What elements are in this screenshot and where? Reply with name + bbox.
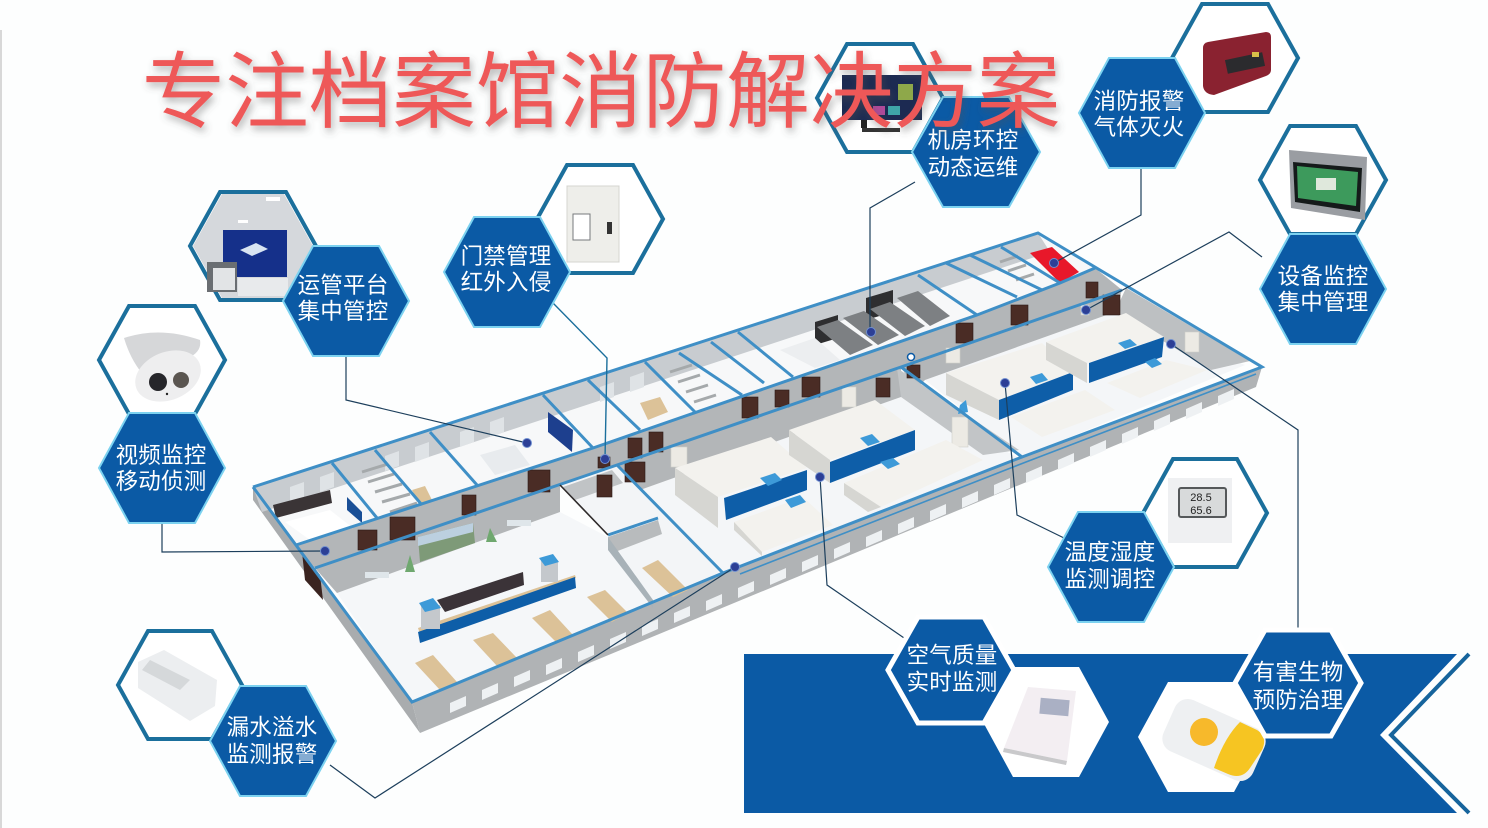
callout: temperature and humidity (1048, 459, 1267, 622)
icon: temperature sensor: 28.5 (1190, 492, 1212, 504)
callout: temperature and humidity: 监测调控 (1065, 567, 1155, 592)
icon: air quality sensor (1003, 687, 1076, 765)
callout: water leak: 监测报警 (227, 742, 317, 767)
server racks (780, 290, 950, 368)
storage cabinets (675, 313, 1207, 556)
callout: video surveillance: 视频监控 (116, 443, 206, 468)
callout: room environment: 动态运维 (928, 155, 1018, 180)
top row back wall (253, 233, 1050, 512)
corridor walls (296, 268, 1250, 608)
callout: fire alarm: 气体灭火 (1094, 115, 1184, 140)
title: 专注档案馆消防解决方案 (142, 45, 1060, 139)
callout: room environment: 机房环控 (928, 128, 1018, 153)
doors (358, 282, 1120, 550)
callout: temperature and humidity: 温度湿度 (1065, 540, 1155, 565)
lobby (365, 520, 688, 690)
blue wall outlines (253, 233, 1262, 702)
icon: temperature sensor (1168, 478, 1232, 543)
wall mounted units (671, 305, 1199, 467)
icon: temperature sensor: 65.6 (1190, 505, 1212, 517)
bottom banner (744, 654, 1469, 813)
callout: equipment monitoring (1260, 126, 1386, 344)
callout: operations platform: 运管平台 (298, 273, 388, 298)
icon: dome camera (124, 332, 209, 411)
exterior walls (253, 367, 1262, 733)
icon: monitor (842, 75, 922, 132)
callout: access control: 门禁管理 (461, 244, 551, 269)
callout: access control: 红外入侵 (461, 270, 551, 295)
callout: operations platform: 集中管控 (298, 299, 388, 324)
icon: control room video wall (193, 194, 313, 298)
icon: leak detector (138, 650, 217, 721)
callout: air quality: 实时监测 (907, 670, 997, 695)
callout: video surveillance (99, 306, 225, 523)
floors (253, 233, 1245, 702)
icon: fire alarm panel (1203, 32, 1271, 95)
furniture in rooms (273, 397, 668, 540)
callout: water leak (118, 631, 336, 796)
callout: air quality (888, 617, 1109, 777)
callout: equipment monitoring: 设备监控 (1278, 264, 1368, 289)
icon: pest repeller (1158, 694, 1270, 786)
isometric building floor plan (253, 233, 1262, 733)
callout: pest prevention (1138, 630, 1361, 792)
callout: fire alarm: 消防报警 (1094, 89, 1184, 114)
icon: touch panel (1289, 150, 1367, 220)
callout: fire alarm (1079, 4, 1298, 168)
callout: video surveillance: 移动侦测 (116, 469, 206, 494)
callout: pest prevention: 预防治理 (1253, 688, 1343, 713)
connector lines and location dots (162, 168, 1298, 798)
icon: access controller box (567, 186, 619, 262)
callout: equipment monitoring: 集中管理 (1278, 290, 1368, 315)
callout: water leak: 漏水溢水 (227, 715, 317, 740)
stairs (362, 256, 1034, 512)
callout: access control (444, 165, 663, 327)
callout: pest prevention: 有害生物 (1253, 660, 1343, 685)
red gas cylinders (1030, 247, 1079, 283)
callout: room environment (817, 44, 1040, 207)
callout: air quality: 空气质量 (907, 643, 997, 668)
callout: operations platform (190, 192, 409, 356)
